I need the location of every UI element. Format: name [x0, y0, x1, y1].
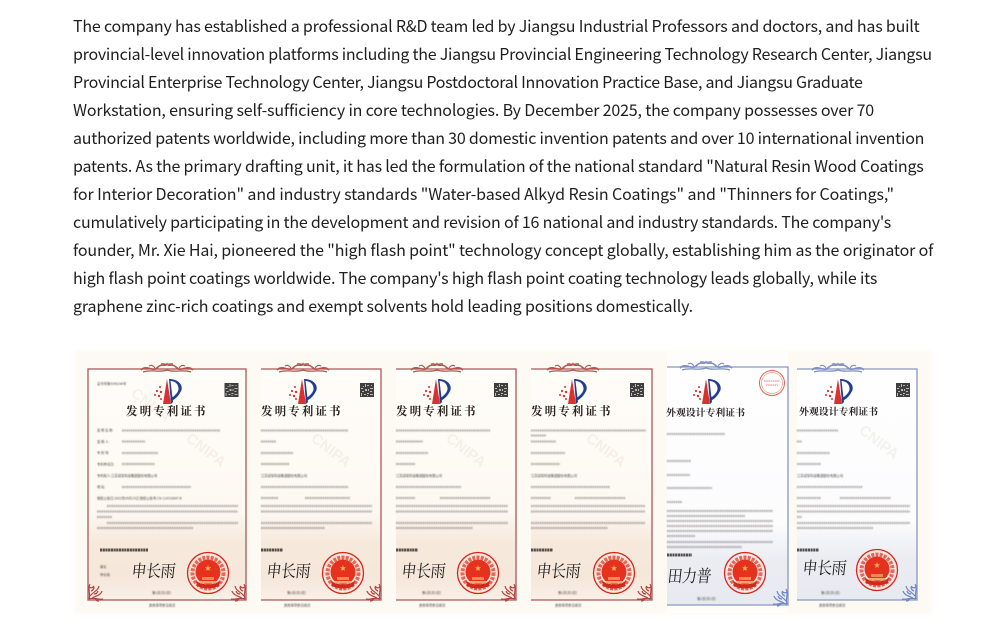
certificate 3: invention patent: 发明专利证书: [396, 403, 478, 419]
certificate 1: invention patent: 局长: [100, 564, 107, 569]
certificate 4: invention patent: CNIPA: [583, 430, 629, 471]
text block: R&D and patents description: cumulatively participating in the development and revision of 16 national and industry standards. The company's: [73, 209, 891, 233]
certificate 6: design patent: 外观设计专利证书: [799, 404, 879, 418]
certificate 3: invention patent: 申长雨: [400, 557, 447, 582]
certificate 4: invention patent: [531, 364, 652, 608]
certificate 6: design patent: CNIPA: [856, 422, 902, 463]
certificate 1: invention patent: CNIPA: [128, 385, 174, 426]
certificate 6: design patent: 其他事项参见续页: [819, 602, 846, 608]
certificate 2: invention patent: 其他事项参见续页: [284, 602, 311, 608]
text block: R&D and patents description: Provincial Enterprise Technology Center, Jiangsu Postdoctoral Innovation Practice Base, and Jiangsu Graduate: [73, 69, 863, 93]
certificate 4: invention patent: 发明专利证书: [531, 403, 613, 419]
certificate 1: invention patent: 专利申请日:: [97, 462, 114, 466]
certificate 4: invention patent: 江苏冠军科技集团股份有限公司: [531, 473, 577, 478]
certificate 1: invention patent: 发 明 人:: [97, 439, 109, 444]
certificate 2: invention patent: 第1页(共2页): [287, 590, 306, 595]
certificate 1: invention patent: 证书号第5094244号: [97, 381, 127, 386]
text block: R&D and patents description: for Interior Decoration" and industry standards "Water-based Alkyd Resin Coatings" and "Thinners for Coatings,": [73, 181, 894, 205]
certificate 1: invention patent: 第1页(共2页): [152, 590, 171, 595]
certificate 6: design patent: 江苏冠军科技集团股份有限公司: [797, 473, 843, 478]
background strip behind certificates: [75, 351, 931, 614]
certificate 4: invention patent: 第1页(共2页): [558, 590, 577, 595]
certificate 1: invention patent: 申长雨: [130, 557, 177, 582]
certificate 1: invention patent: 地 址:: [97, 484, 105, 489]
text block: R&D and patents description: graphene zinc-rich coatings and exempt solvents hold leading positions domestically.: [73, 293, 693, 317]
text block: R&D and patents description: high flash point coatings worldwide. The company's high flash point coating technology leads globally, while its: [73, 265, 877, 289]
certificate 5: design patent: 田力普: [666, 562, 713, 587]
text block: R&D and patents description: The company has established a professional R&D team led by Jiangsu Industrial Professors and doctors, and has built: [73, 13, 919, 37]
certificate 1: invention patent: 其他事项参见续页: [149, 602, 176, 608]
certificate 1: invention patent: 发 明 名 称:: [97, 428, 113, 432]
certificate 3: invention patent: [396, 364, 516, 608]
text block: R&D and patents description: [73, 13, 934, 317]
certificate 1: invention patent: 申长雨: [100, 572, 111, 577]
certificate 1: invention patent: 专 利 号:: [97, 450, 109, 455]
text block: R&D and patents description: Workstation, ensuring self-sufficiency in core technologies. By December 2025, the company possesses over 70: [73, 97, 874, 121]
certificate 2: invention patent: [261, 364, 381, 608]
certificate 6: design patent: 第1页(共1页): [821, 590, 840, 595]
certificate 2: invention patent: CNIPA: [308, 430, 354, 471]
certificate 3: invention patent: 第1页(共2页): [422, 590, 441, 595]
certificate 3: invention patent: 其他事项参见续页: [419, 602, 446, 608]
text block: R&D and patents description: founder, Mr. Xie Hai, pioneered the "high flash point" technology concept globally, establishing him as the originator of: [73, 237, 933, 261]
text block: R&D and patents description: patents. As the primary drafting unit, it has led the formulation of the national standard "Natural Resin Wood Coatings: [73, 153, 924, 177]
certificate 4: invention patent: 其他事项参见续页: [555, 602, 582, 608]
certificate 2: invention patent: 发明专利证书: [261, 403, 343, 419]
certificate 2: invention patent: 申长雨: [265, 557, 312, 582]
certificate 6: design patent: [797, 364, 917, 608]
text block: R&D and patents description: provincial-level innovation platforms including the Jiangsu Provincial Engineering Technology Research Center, Jiangsu: [73, 41, 932, 65]
certificate 5: design patent: [666, 351, 788, 613]
certificate 1: invention patent: 专利权人:江苏冠军科技集团股份有限公司: [97, 473, 157, 478]
certificate 1: invention patent: [88, 364, 246, 608]
certificate 1: invention patent: 授权公告日:2022年09月15日 授权公告号:CN 114315847 B: [97, 496, 183, 500]
text block: R&D and patents description: authorized patents worldwide, including more than 30 domestic invention patents and over 10 international invention: [73, 125, 924, 149]
certificate 3: invention patent: CNIPA: [443, 430, 489, 471]
certificate 2: invention patent: 江苏冠军科技集团股份有限公司: [261, 473, 307, 478]
certificate 6: design patent: 申长雨: [801, 554, 848, 579]
certificate 1: invention patent: 发明专利证书: [126, 403, 208, 419]
certificate 1: invention patent: CNIPA: [183, 430, 229, 471]
certificate 5: design patent: 第1页(共1页): [697, 596, 716, 601]
certificate 3: invention patent: 江苏冠军科技集团股份有限公司: [396, 473, 442, 478]
certificate 4: invention patent: 申长雨: [535, 557, 582, 582]
certificate 5: design patent: 外观设计专利证书: [666, 405, 746, 419]
